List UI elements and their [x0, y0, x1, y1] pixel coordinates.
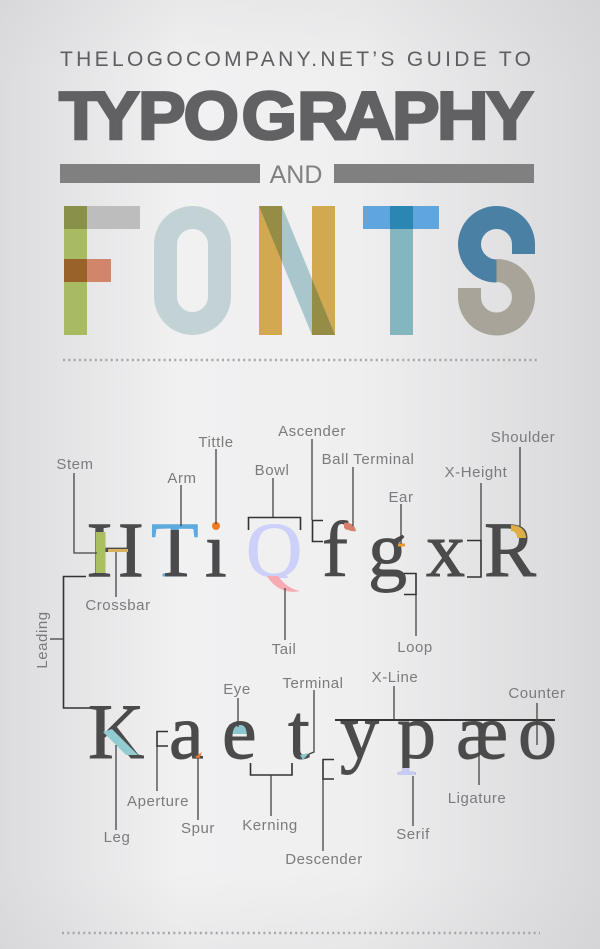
label: Kerning: Kerning [242, 817, 298, 834]
letter e: e [222, 688, 257, 775]
title letter: F [64, 206, 140, 335]
letter T with arm: T [151, 506, 199, 593]
label: Leading [34, 576, 90, 708]
title letter: N [259, 206, 335, 335]
label: Loop [397, 574, 433, 656]
label: Leg [104, 745, 130, 846]
letter K with leg: K [88, 688, 144, 775]
ear accent [398, 544, 405, 546]
label: Ball Terminal: Ball Terminal [322, 451, 414, 468]
label: Tail: Tail [272, 641, 296, 658]
label: Arm [167, 470, 197, 526]
label: Bowl [248, 462, 300, 530]
label: Counter: Counter [508, 685, 566, 702]
label: Loop: Loop [397, 639, 433, 656]
letter T with arm: T [151, 506, 199, 593]
label: Tittle [198, 434, 234, 524]
heading: and with rules: AND [270, 161, 322, 189]
label: Eye: Eye [223, 681, 251, 698]
Q tail accent [267, 576, 300, 592]
letter H with stem and crossbar: H [87, 506, 143, 593]
label: Descender [285, 760, 363, 868]
heading: and with rules [60, 161, 534, 189]
anatomy row 2 letters [90, 706, 554, 775]
letter p with serif [398, 721, 434, 775]
letter t: t [288, 688, 310, 775]
title letter: S [470, 218, 524, 324]
label: Tail [272, 588, 296, 658]
letter T with arm [152, 524, 198, 576]
letter Q with tail: Q [246, 506, 302, 593]
letter R: R [484, 506, 536, 593]
letter x: x [426, 506, 465, 593]
label: Terminal [282, 675, 344, 754]
label: Ascender: Ascender [278, 423, 346, 440]
label: Descender: Descender [285, 851, 363, 868]
label: Spur: Spur [181, 820, 215, 837]
label: Serif [396, 776, 430, 843]
heading: guide to: THELOGOCOMPANY.NET’S GUIDE TO [60, 48, 531, 71]
label: Tittle: Tittle [198, 434, 234, 451]
label: Aperture: Aperture [127, 793, 189, 810]
label: Shoulder [491, 429, 555, 527]
label: Crossbar: Crossbar [85, 597, 151, 614]
dotted divider bottom [62, 932, 540, 934]
label: Ear [388, 489, 414, 544]
label: X-Height: X-Height [445, 464, 508, 481]
label: Leg: Leg [104, 829, 130, 846]
label: Stem [56, 456, 97, 553]
letter g: g [368, 506, 407, 593]
label: Counter [508, 685, 566, 745]
label: Ascender [278, 423, 346, 542]
terminal accent [300, 753, 309, 760]
label: Ball Terminal [322, 451, 414, 526]
label: Ligature: Ligature [448, 790, 506, 807]
label: X-Height [445, 464, 508, 577]
anatomy row 1 letters [88, 520, 536, 593]
shoulder accent [511, 525, 526, 538]
title letter: O [166, 218, 220, 324]
letter p with serif: p [397, 688, 436, 775]
letter ae: æ [456, 688, 508, 775]
icon: tittle dot [212, 522, 220, 530]
label: Aperture [127, 732, 189, 810]
label: Bowl: Bowl [255, 462, 289, 479]
label: X-Line: X-Line [372, 669, 418, 686]
label: Stem: Stem [56, 456, 94, 473]
eye accent [229, 724, 248, 734]
letter a: a [169, 688, 204, 775]
label: Arm: Arm [167, 470, 197, 487]
label: Terminal: Terminal [282, 675, 344, 692]
letter f: f [322, 506, 348, 593]
letter y: y [340, 688, 379, 775]
label: Shoulder: Shoulder [491, 429, 555, 446]
title letter: T [363, 206, 439, 335]
ball terminal accent [344, 523, 356, 531]
letter i with tittle: i [205, 506, 227, 593]
letter o: o [518, 688, 557, 775]
label: Ear: Ear [388, 489, 414, 506]
label: Ligature [448, 740, 506, 807]
label: Spur [181, 758, 215, 837]
letter p with serif: p [397, 688, 436, 775]
spur accent [195, 752, 202, 759]
label: Kerning [242, 763, 298, 834]
label: Leading: Leading [34, 611, 51, 669]
label: Eye [223, 681, 251, 727]
label: Crossbar [85, 552, 151, 614]
label: Serif: Serif [396, 826, 430, 843]
title: typography: TYPOGRAPHY [59, 78, 534, 154]
dotted divider top [63, 359, 540, 361]
